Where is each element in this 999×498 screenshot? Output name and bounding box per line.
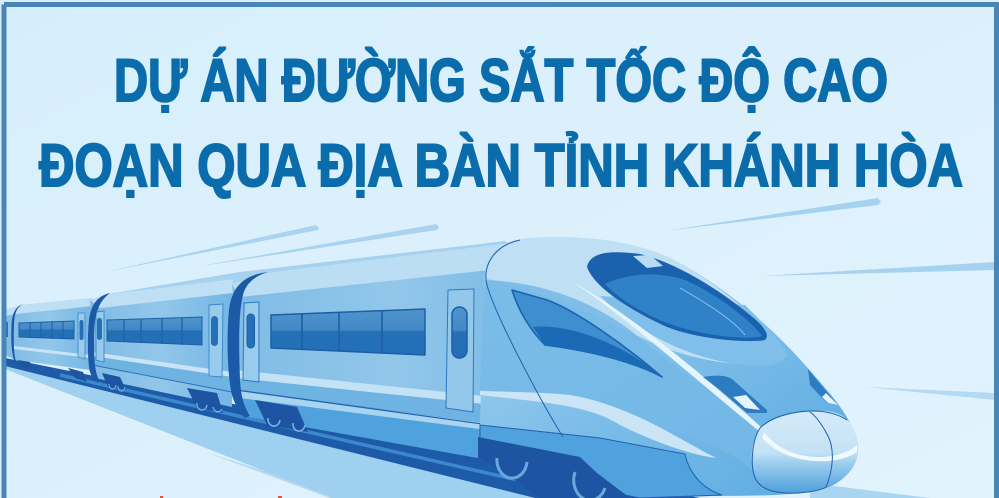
windows [107,317,202,345]
door [78,313,85,359]
carriage gaps [11,272,268,418]
headlight left [703,376,767,413]
upper cab highlight [485,237,787,364]
doors [243,289,474,412]
head body [480,237,858,498]
light edge streak [570,280,770,435]
red cropped marks at bottom edge [160,496,282,498]
body stripe [480,391,716,458]
windshield [587,252,767,341]
skirt [480,425,722,498]
windows [19,321,74,339]
speed lines [105,198,995,498]
windows [271,309,425,355]
ground shadow under train [5,364,535,498]
doors [96,304,223,377]
train [5,237,858,498]
nose cap [752,411,858,493]
head bogie [478,437,630,498]
carriage 3 [232,243,620,480]
locomotive [478,237,858,498]
windshield halo [600,296,786,366]
bogies [18,360,308,432]
roof streak [108,241,520,294]
side window [512,290,662,377]
headlight right [808,369,838,405]
head seam [486,240,563,437]
cab side shading [480,280,760,470]
title [39,47,963,199]
carriage 1 [5,298,93,370]
rail track [5,358,700,498]
carriage 2 [90,279,233,407]
